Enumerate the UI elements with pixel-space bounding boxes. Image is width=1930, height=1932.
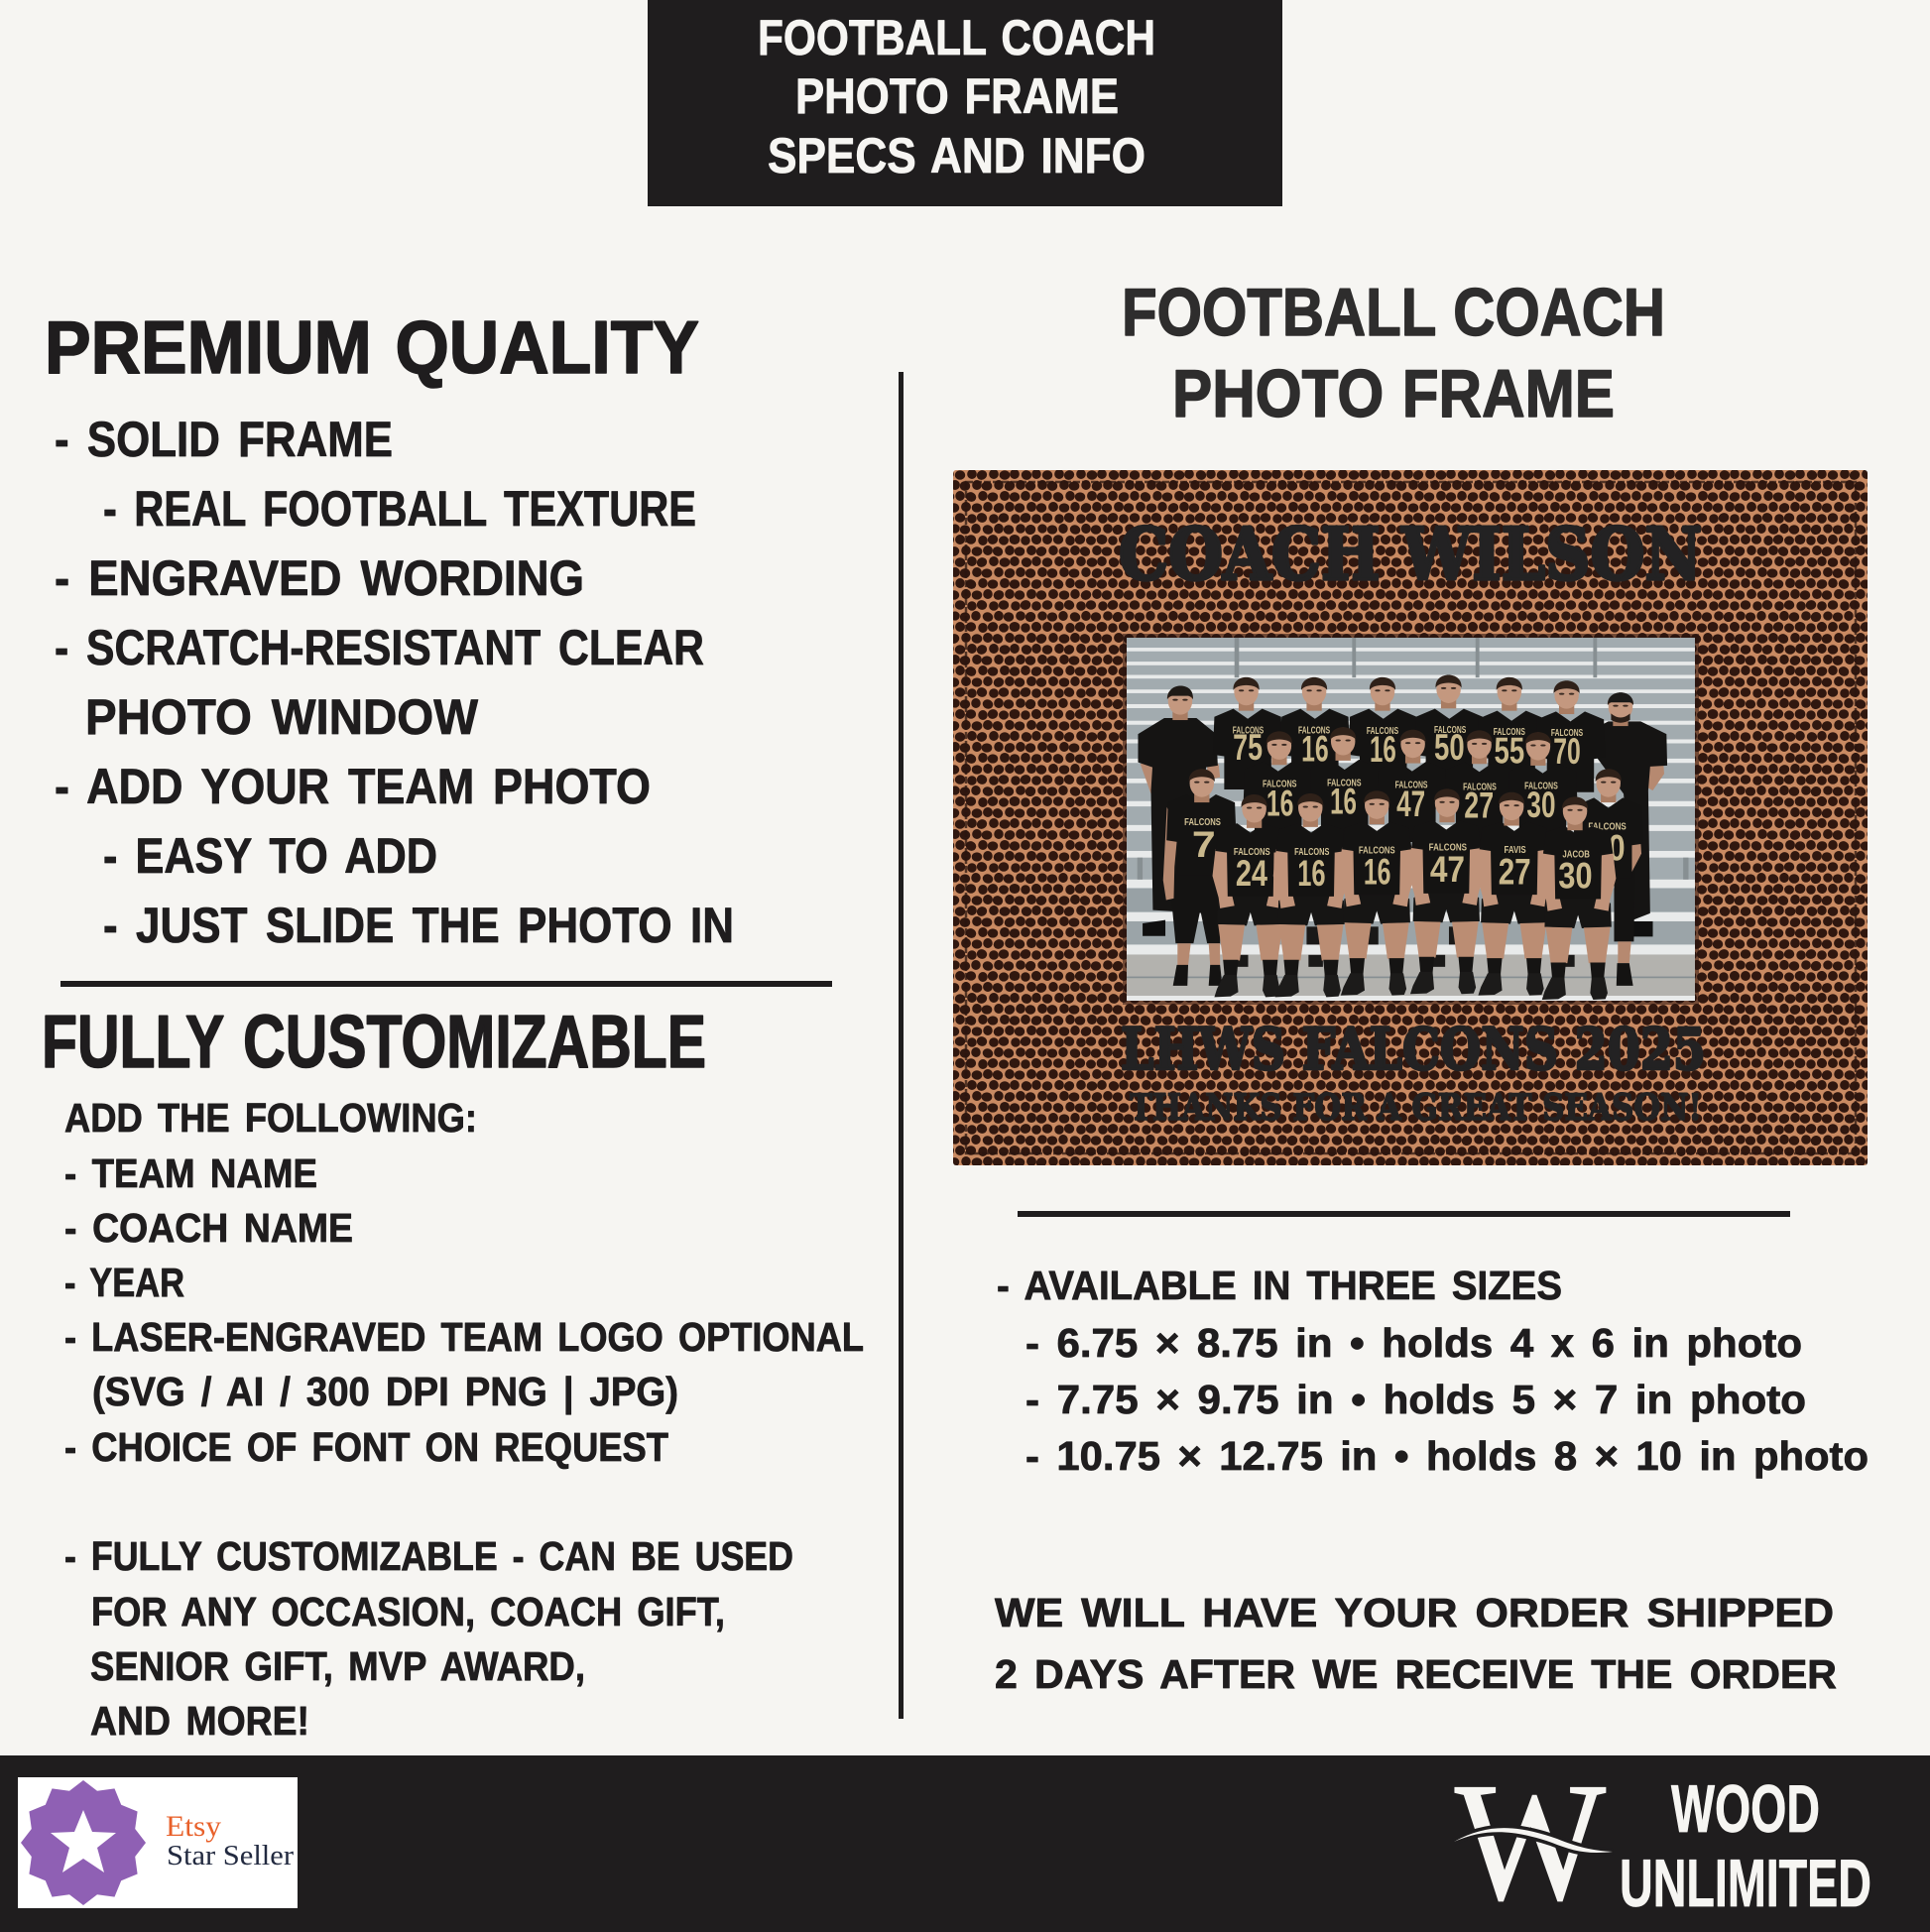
standing end players: 0 [1609, 827, 1626, 869]
seated front row players: FAVIS [1504, 845, 1526, 856]
standing end players: FALCONS [1588, 821, 1627, 832]
text block: available sizes: - AVAILABLE IN THREE SIZES [997, 1263, 1562, 1308]
back row players: 55 [1495, 730, 1524, 772]
list: customization options: - TEAM NAME [64, 1150, 317, 1196]
middle row players: FALCONS [1524, 781, 1558, 791]
heading: premium quality: PREMIUM QUALITY [45, 305, 699, 389]
back row players: 70 [1553, 731, 1581, 773]
text block: shipping note [995, 1590, 1837, 1697]
engraved text: team and year: LHWS FALCONS 2025 [1121, 1016, 1706, 1083]
title banner: PHOTO FRAME [795, 68, 1119, 124]
text block: shipping note: 2 DAYS AFTER WE RECEIVE THE ORDER [995, 1651, 1837, 1697]
list: customization options: - CHOICE OF FONT ON REQUEST [64, 1424, 668, 1470]
coaches [1138, 686, 1667, 936]
text block: shipping note: WE WILL HAVE YOUR ORDER SHIPPED [995, 1590, 1834, 1635]
seated front row players: 30 [1558, 855, 1593, 897]
seated front row players: FALCONS [1234, 847, 1270, 858]
seated front row players: 24 [1236, 852, 1267, 894]
heading: product title [1122, 275, 1665, 431]
back row players: 16 [1370, 729, 1396, 771]
back row players: 75 [1233, 727, 1263, 769]
logo: wood unlimited: WOOD [1671, 1771, 1820, 1847]
logo: wood unlimited [1454, 1749, 1871, 1932]
middle row players: 47 [1396, 784, 1425, 825]
list: quality features: - SOLID FRAME [55, 412, 393, 467]
panel: fully customizable [42, 1000, 864, 1744]
list: customization options: - YEAR [64, 1260, 184, 1305]
standing end players [1163, 769, 1643, 986]
middle row players: 16 [1330, 781, 1357, 822]
list: quality features: - REAL FOOTBALL TEXTURE [103, 481, 696, 537]
text block: available sizes: - 6.75 × 8.75 in • holds 4 x 6 in photo [1025, 1320, 1802, 1366]
standing end players: FALCONS [1184, 816, 1221, 828]
seated front row players: FALCONS [1359, 845, 1395, 856]
back row players: FALCONS [1551, 728, 1583, 739]
footer bar [0, 1749, 1930, 1932]
text block: available sizes: - 7.75 × 9.75 in • holds 5 × 7 in photo [1025, 1377, 1806, 1422]
back row players: 50 [1434, 727, 1465, 769]
list: quality features: - JUST SLIDE THE PHOTO IN [103, 898, 734, 953]
badge: etsy star seller: Etsy [166, 1810, 221, 1843]
list: customization options: - COACH NAME [64, 1205, 353, 1251]
engraved text: thanks message: THANKS FOR A GREAT SEASON! [1130, 1087, 1702, 1129]
seated front row players: JACOB [1562, 849, 1590, 860]
text block: available sizes: - 10.75 × 12.75 in • holds 8 × 10 in photo [1025, 1433, 1869, 1479]
product photo: football leather frame [953, 470, 1868, 1165]
list: quality features [55, 412, 734, 953]
seated front row players: 16 [1364, 851, 1390, 893]
seated front row players [1213, 788, 1616, 1000]
text block: occasions: - FULLY CUSTOMIZABLE - CAN BE USED [64, 1533, 793, 1579]
list: quality features: - EASY TO ADD [103, 828, 437, 884]
heading: product title: PHOTO FRAME [1172, 356, 1615, 431]
standing end players: 7 [1192, 823, 1216, 865]
heading: fully customizable: FULLY CUSTOMIZABLE [42, 1000, 706, 1083]
list: quality features: - ADD YOUR TEAM PHOTO [55, 759, 651, 814]
middle row players: FALCONS [1463, 782, 1497, 792]
text block: available sizes [997, 1263, 1869, 1479]
back row players: FALCONS [1367, 726, 1398, 737]
list: customization options: ADD THE FOLLOWING: [64, 1095, 477, 1141]
list: quality features: PHOTO WINDOW [85, 689, 479, 745]
seated front row players: FALCONS [1294, 847, 1329, 858]
seated front row players: 47 [1430, 849, 1465, 891]
badge: etsy star seller: Star Seller [167, 1840, 294, 1872]
back row players: FALCONS [1434, 724, 1466, 736]
middle row players: 30 [1526, 784, 1556, 825]
team photo [1127, 638, 1695, 1001]
middle row players: 27 [1464, 785, 1494, 826]
text block: occasions [64, 1533, 793, 1744]
title banner: FOOTBALL COACH [758, 10, 1155, 65]
list: customization options: (SVG / AI / 300 DPI PNG | JPG) [92, 1369, 678, 1414]
seated front row players: 27 [1499, 851, 1531, 893]
list: customization options: - LASER-ENGRAVED TEAM LOGO OPTIONAL [64, 1314, 864, 1360]
middle row players: 16 [1267, 783, 1293, 824]
text block: occasions: AND MORE! [90, 1698, 309, 1744]
panel: premium quality [45, 305, 734, 953]
icon: purple star badge [21, 1780, 146, 1905]
engraved text: coach name: COACH WILSON [1119, 512, 1702, 596]
back row players: 16 [1301, 728, 1329, 770]
badge: etsy star seller [18, 1777, 298, 1908]
seated front row players: 16 [1297, 852, 1326, 894]
middle row players: FALCONS [1395, 780, 1428, 790]
middle row players [1244, 727, 1578, 844]
back row players: FALCONS [1298, 725, 1330, 736]
back row players: FALCONS [1494, 726, 1525, 738]
list: customization options [64, 1095, 864, 1470]
middle row players: FALCONS [1263, 779, 1296, 789]
title banner [648, 0, 1282, 206]
back row players [1213, 675, 1606, 792]
text block: occasions: FOR ANY OCCASION, COACH GIFT, [91, 1589, 725, 1634]
title banner: SPECS AND INFO [768, 128, 1146, 183]
shoes behind the bench [1235, 926, 1575, 967]
text block: occasions: SENIOR GIFT, MVP AWARD, [90, 1643, 585, 1689]
seated front row players: FALCONS [1429, 842, 1467, 853]
heading: product title: FOOTBALL COACH [1122, 275, 1665, 350]
back row players: FALCONS [1233, 725, 1264, 736]
middle row players: FALCONS [1327, 778, 1362, 788]
list: quality features: - ENGRAVED WORDING [55, 550, 584, 606]
list: quality features: - SCRATCH-RESISTANT CLEAR [55, 620, 704, 675]
icon: W monogram with swoosh: W [1455, 1749, 1607, 1932]
